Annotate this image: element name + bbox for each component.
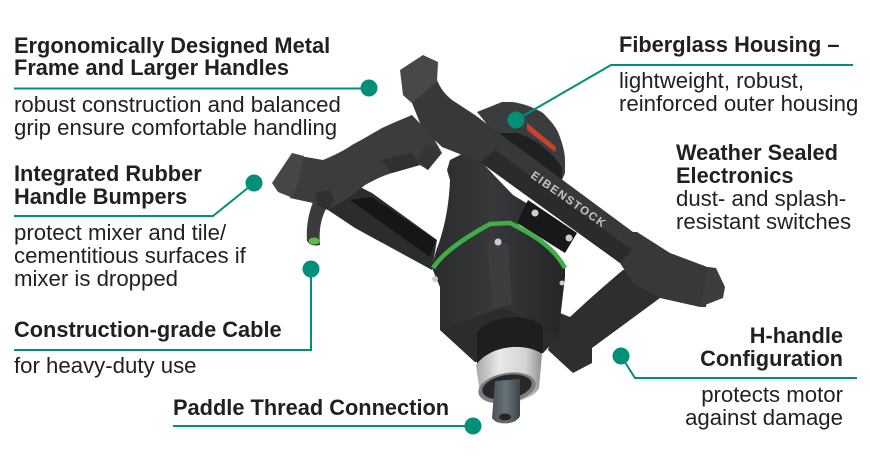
leader line (14, 80, 378, 96)
body text: reinforced outer housing (619, 91, 858, 116)
leader line (508, 65, 853, 128)
heading: Ergonomically Designed Metal (14, 33, 330, 58)
heading (700, 323, 843, 371)
lower frame bar, left (328, 186, 437, 270)
gearbox rib (487, 243, 512, 308)
silver ring (476, 347, 542, 403)
gearbox lower housing (432, 223, 565, 362)
upper frame bar (403, 80, 710, 307)
heading (14, 33, 330, 80)
brand name on bar: EIBENSTOCK (528, 170, 608, 230)
top cap of fiberglass housing (477, 102, 565, 180)
bearing (476, 368, 538, 408)
body text: mixer is dropped (14, 266, 178, 291)
dark band under cap (497, 133, 562, 180)
cable with green tip (307, 202, 327, 246)
body text: dust- and splash- (676, 186, 846, 211)
callout: paddle thread (173, 395, 482, 434)
body text: protects motor (701, 382, 844, 407)
right lower handle (548, 270, 660, 373)
callout: cable (14, 260, 320, 378)
heading: Handle Bumpers (14, 184, 187, 209)
body text: against damage (685, 405, 843, 430)
body text (14, 220, 247, 291)
shaft (492, 379, 520, 423)
body text (619, 68, 858, 116)
brand label (527, 123, 556, 152)
leader line (14, 174, 262, 216)
leader line (612, 348, 857, 378)
heading: Fiberglass Housing – (619, 32, 839, 57)
body text: cementitious surfaces if (14, 243, 247, 268)
heading: Configuration (700, 346, 843, 371)
heading: Weather Sealed (676, 140, 838, 165)
left handle with rubber bumper (272, 115, 442, 210)
callout: frame and handles (14, 33, 378, 140)
body text: for heavy-duty use (14, 353, 197, 378)
body text: lightweight, robust, (619, 68, 804, 93)
screws (432, 210, 572, 286)
green ring (433, 223, 565, 268)
heading: Electronics (676, 163, 794, 188)
body text (14, 92, 341, 140)
callout: weather sealed electronics (676, 140, 851, 234)
callout: H-handle (612, 323, 857, 430)
heading: Frame and Larger Handles (14, 55, 289, 80)
leader line (173, 418, 482, 434)
neck (477, 317, 543, 364)
right bumper (700, 267, 725, 307)
body text: grip ensure comfortable handling (14, 115, 337, 140)
heading (676, 140, 838, 188)
heading: Integrated Rubber (14, 161, 202, 186)
lower gearbox facet (440, 307, 558, 362)
heading (14, 161, 202, 209)
shaft end hole (499, 414, 511, 420)
switch bracket (517, 200, 577, 253)
top bumper (400, 55, 438, 103)
body text (685, 382, 844, 430)
heading: Construction-grade Cable (14, 317, 282, 342)
body text: protect mixer and tile/ (14, 220, 227, 245)
body text (676, 186, 851, 234)
callout: fiberglass housing (508, 32, 858, 128)
leader line (14, 260, 320, 350)
motor upper housing (432, 150, 565, 268)
illustration: mixer power tool (272, 55, 725, 423)
heading: Paddle Thread Connection (173, 395, 449, 420)
upper bar darker underside (480, 150, 632, 263)
callout: rubber bumpers (14, 161, 262, 291)
body text: robust construction and balanced (14, 92, 341, 117)
heading: H-handle (750, 323, 843, 348)
body text: resistant switches (676, 209, 851, 234)
